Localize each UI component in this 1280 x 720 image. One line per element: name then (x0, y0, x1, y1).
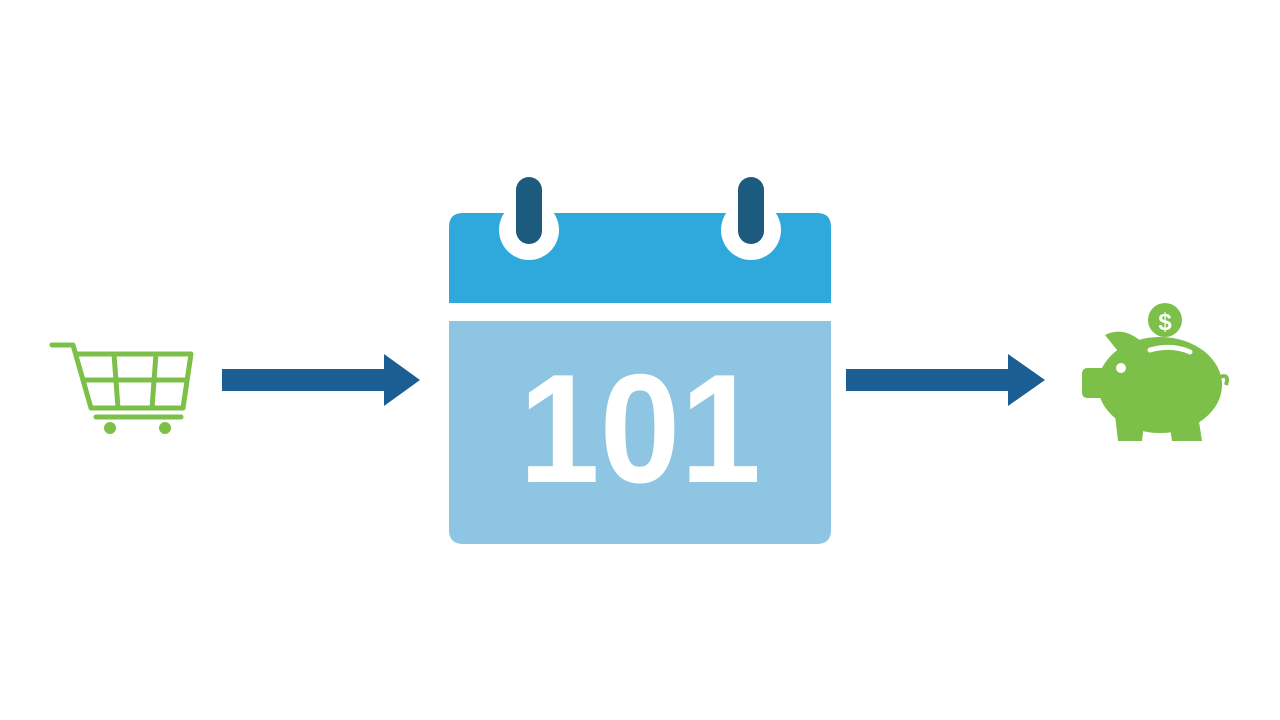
arrow: cart to calendar (222, 354, 420, 406)
coin (1148, 303, 1182, 337)
arrow: calendar to piggy bank (846, 354, 1045, 406)
icon: piggy bank: $ (1158, 309, 1172, 336)
calendar body (449, 321, 831, 544)
icon: piggy bank (1082, 303, 1227, 441)
calendar number: 101 (519, 342, 761, 515)
icon: calendar (449, 177, 831, 544)
calendar rings (499, 177, 781, 260)
icon: shopping cart (52, 345, 191, 434)
calendar header (449, 213, 831, 303)
